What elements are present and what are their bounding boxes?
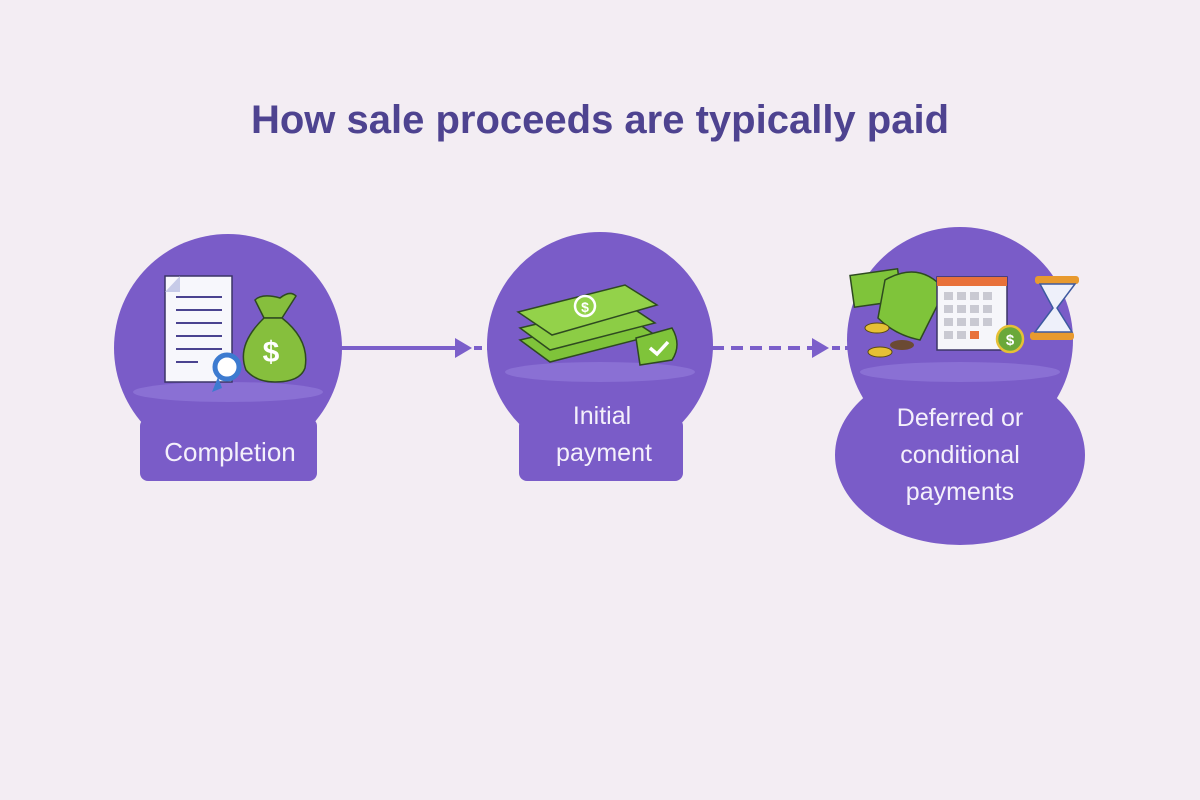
label: initial payment: Initial	[573, 402, 631, 430]
arrow: dashed	[712, 338, 850, 358]
icon: cash stack: $	[581, 299, 589, 315]
panel: initial payment	[487, 232, 713, 481]
panel: completion	[114, 234, 342, 481]
panel: deferred payments: conditional	[900, 441, 1020, 469]
icon: document	[165, 276, 239, 392]
title: How sale proceeds are typically paid	[251, 98, 949, 142]
icon: money, calendar, hourglass	[850, 269, 1079, 357]
icon: money bag: $	[263, 336, 280, 369]
icon: money, calendar, hourglass: $	[1006, 332, 1015, 349]
label: deferred payments: Deferred or	[897, 404, 1023, 432]
icon: cash stack	[518, 285, 677, 365]
panel: initial payment: payment	[556, 439, 652, 467]
panel: deferred payments: payments	[906, 478, 1014, 506]
icon: money bag	[243, 293, 306, 382]
label: completion: Completion	[164, 437, 296, 467]
arrow: solid	[340, 338, 490, 358]
panel: deferred payments	[835, 227, 1085, 545]
